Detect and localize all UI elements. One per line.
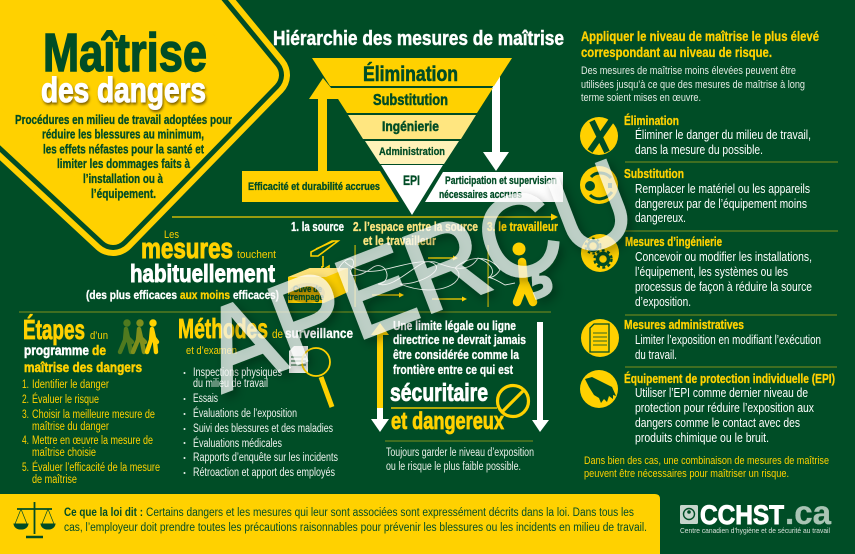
icon: document and magnifier — [289, 346, 332, 407]
item: administrative — [624, 318, 821, 362]
item: administrative: Mesures administratives — [624, 318, 744, 332]
list: steps — [22, 379, 160, 486]
arrow: left double — [371, 323, 389, 432]
heading: where controls apply: (des plus efficaces — [86, 290, 177, 302]
tier: administration — [365, 141, 459, 164]
heading: where controls apply: Les — [164, 229, 179, 241]
text block: definition: l’installation ou à — [83, 172, 163, 186]
item: elimination: dans la mesure du possible. — [635, 143, 763, 157]
item: substitution — [624, 167, 810, 225]
heading: methods: Méthodes — [178, 313, 268, 344]
item: substitution: dangereux par de l’équipement moins — [635, 197, 807, 211]
tier: substitution: Substitution — [373, 92, 448, 109]
tier: PPE: EPI — [403, 172, 420, 188]
item: engineering: processus de façon à réduire la source — [635, 280, 812, 294]
tier: engineering: Ingénierie — [382, 118, 439, 134]
heading: where controls apply: efficaces) — [233, 290, 279, 302]
divider — [19, 311, 551, 313]
item: elimination: Éliminer le danger du milieu de travail, — [635, 127, 811, 142]
heading: apply highest level — [581, 28, 819, 60]
list: methods: du milieu de travail — [193, 378, 268, 390]
icon: yellow diamond sign — [0, 0, 265, 231]
item: engineering: l’équipement, les systèmes ou les — [635, 265, 788, 279]
text block: law: Ce que la loi dit : — [64, 507, 143, 519]
heading: methods: surveillance — [285, 326, 353, 341]
text block: definition — [15, 113, 232, 201]
heading: steps: Étapes — [23, 314, 85, 345]
heading: steps: programme — [24, 342, 89, 358]
icon: dip tank — [288, 268, 348, 303]
list: methods: Essais — [193, 393, 218, 405]
text block: combination note — [584, 455, 829, 480]
label: path: et le travailleur — [363, 234, 436, 248]
icon: substitution — [580, 166, 618, 204]
chart: inverted pyramid — [312, 58, 512, 215]
label: efficacy — [242, 171, 399, 202]
panel: hierarchy of controls — [242, 28, 564, 215]
heading: steps — [23, 314, 142, 375]
list: steps: Choisir la meilleure mesure de — [32, 409, 155, 421]
heading: where controls apply: habituellement — [130, 260, 276, 288]
text block: intro: terme soient mises en œuvre. — [581, 92, 701, 104]
divider: safe and dangerous — [391, 407, 497, 409]
item: engineering: Mesures d’ingénierie — [625, 235, 722, 249]
panel: methods — [178, 313, 353, 479]
heading: methods — [178, 313, 353, 357]
text block: definition: réduire les blessures au minimum, — [42, 128, 204, 142]
icon: dip tank: Cuve de — [293, 284, 322, 295]
item: PPE: Utiliser l’EPI comme dernier niveau de — [635, 386, 808, 400]
list: methods: Rapports d’enquête sur les incidents — [193, 452, 338, 464]
icon: walking figures — [120, 320, 157, 352]
item: engineering — [625, 235, 812, 309]
arrow: participation down — [483, 76, 509, 171]
icon: prohibited — [498, 386, 528, 416]
text block: limit: Une limite légale ou ligne — [393, 318, 516, 333]
tier: elimination: Élimination — [363, 63, 458, 86]
label: participation: nécessaires accrues — [439, 189, 522, 201]
label: path — [353, 220, 478, 248]
item: PPE: protection pour réduire l’exposition aux — [635, 401, 815, 415]
icon: ventilation hood — [311, 241, 340, 276]
label: worker: 3. le travailleur — [487, 220, 558, 234]
heading: methods: et d’examen — [186, 345, 237, 357]
icon: worker — [512, 242, 533, 302]
tier: administration: Administration — [379, 146, 445, 158]
text block: limit: être considérée comme la — [393, 347, 520, 362]
panel: steps — [22, 314, 160, 486]
text block: combination note: peuvent être nécessaires pour maîtriser un risque. — [584, 468, 789, 480]
item: substitution: Remplacer le matériel ou les appareils — [635, 182, 810, 196]
heading: where controls apply — [86, 229, 279, 302]
text block: limit: directrice ne devrait jamais — [393, 332, 526, 347]
item: PPE — [624, 371, 835, 445]
text block: lowest exposure — [386, 447, 534, 473]
logo: CCHST — [680, 494, 832, 535]
heading: where controls apply: touchent — [237, 249, 276, 261]
item: elimination: Élimination — [624, 113, 679, 128]
logo: CCHST: .ca — [785, 494, 832, 531]
squiggle: contaminant path — [338, 258, 515, 290]
list: methods: Inspections physiques — [193, 367, 282, 379]
panel: hazard sign — [0, 0, 265, 231]
tier: PPE — [381, 165, 443, 215]
tier: substitution — [331, 88, 493, 113]
item: PPE: produits chimique ou le bruit. — [635, 431, 769, 445]
item: engineering: Concevoir ou modifier les installations, — [635, 250, 812, 264]
list: steps: maîtrise du danger — [32, 421, 109, 433]
heading: steps: d’un — [90, 330, 108, 342]
list: steps: Évaluer l’efficacité de la mesure — [32, 461, 160, 474]
text block: lowest exposure: ou le risque le plus faible possible. — [386, 461, 521, 473]
panel: law footer — [0, 494, 660, 554]
title: Maîtrise — [43, 23, 207, 83]
arrow: effectiveness up — [309, 78, 340, 171]
heading: where controls apply: aux moins — [180, 290, 230, 302]
list: methods: Évaluations de l’exposition — [193, 407, 297, 420]
label: participation: Participation et supervision — [445, 175, 557, 187]
label: source: 1. la source — [291, 220, 344, 234]
icon: elimination — [580, 117, 618, 155]
zone dividers — [355, 245, 488, 307]
text block: limit — [393, 318, 526, 377]
text block: intro — [581, 65, 805, 104]
icon: engineering — [581, 234, 619, 272]
list: methods: Rétroaction et apport des employés — [193, 467, 335, 479]
tier: elimination — [312, 58, 512, 86]
heading: apply highest level: correspondant au niveau de risque. — [581, 44, 772, 60]
label: path: 2. l’espace entre la source — [353, 220, 478, 234]
text block: limit: frontière entre ce qui est — [393, 362, 514, 377]
label: dangerous: et dangereux — [391, 408, 504, 435]
text block: law: cas, l’employeur doit prendre toutes les précautions raisonnables pour prévenir les blessures ou les incidents en milieu de travail. — [64, 522, 647, 534]
text block: definition: Procédures en milieu de travail adoptées pour — [15, 113, 232, 127]
icon: gloves — [580, 370, 618, 408]
arrows: airflow — [372, 256, 467, 302]
item: substitution: dangereux. — [635, 211, 686, 225]
heading: Hiérarchie des mesures de maîtrise — [273, 28, 564, 50]
text block: intro: utilisées jusqu’à ce que des mesures de maîtrise à long — [581, 79, 805, 91]
list: steps: 5. — [22, 462, 29, 474]
icon: dip tank: trempage — [288, 292, 324, 303]
watermark: APERÇU — [184, 134, 651, 416]
item: engineering: d’exposition. — [635, 295, 691, 309]
list: steps: 1. — [22, 379, 29, 391]
list: steps: maîtrise choisie — [32, 447, 96, 459]
text block: definition: les effets néfastes pour la santé et — [43, 142, 205, 156]
logo: CCHST: CCHST — [700, 500, 784, 530]
list: steps: 4. — [22, 435, 29, 447]
list: steps: 2. — [22, 394, 29, 406]
item: PPE: dangers comme le contact avec des — [635, 416, 800, 430]
list: steps: 3. — [22, 409, 29, 421]
tier: engineering — [348, 115, 476, 139]
list: methods — [184, 367, 338, 479]
text block: law — [64, 507, 647, 534]
item: elimination — [624, 113, 811, 157]
arrow: right down — [532, 322, 549, 432]
heading: steps: maîtrise des dangers — [24, 359, 142, 375]
text block: definition: limiter les dommages faits à — [57, 157, 190, 171]
title — [41, 23, 207, 110]
icon: scales of justice — [14, 502, 55, 537]
label: safe: sécuritaire — [390, 379, 488, 407]
list: steps: de maîtrise — [32, 474, 77, 486]
heading: where controls apply: mesures — [141, 233, 233, 265]
label: participation — [425, 172, 563, 202]
heading: methods: de — [272, 329, 283, 341]
list: methods: Suivi des blessures et des maladies — [193, 423, 333, 435]
arrow: source to worker axis — [172, 214, 558, 220]
logo: CCHST: Centre canadien d’hygiène et de sécurité au travail — [680, 526, 830, 535]
item: administrative: du travail. — [635, 348, 677, 362]
panel: measures detail — [580, 28, 838, 480]
heading: steps: de — [92, 342, 106, 358]
list: methods: Évaluations médicales — [193, 437, 282, 450]
text block: intro: Des mesures de maîtrise moins élevées peuvent être — [581, 65, 796, 77]
icon: administrative — [581, 319, 619, 357]
text block: law: Certains dangers et les mesures qui leur sont associées sont expressément décrits dans la loi. Dans tous les — [146, 507, 634, 519]
item: substitution: Substitution — [624, 167, 684, 181]
title: des dangers — [41, 71, 206, 110]
text block: definition: l’équipement. — [91, 187, 156, 201]
list: steps: Mettre en œuvre la mesure de — [32, 435, 153, 447]
list: steps: Identifier le danger — [32, 379, 109, 391]
text block: lowest exposure: Toujours garder le niveau d’exposition — [386, 447, 534, 459]
panel: legal limit — [371, 318, 549, 473]
list: steps: Évaluer le risque — [32, 393, 99, 406]
diagram: source path worker — [288, 220, 558, 307]
label: efficacy: Efficacité et durabilité accrues — [248, 181, 380, 193]
